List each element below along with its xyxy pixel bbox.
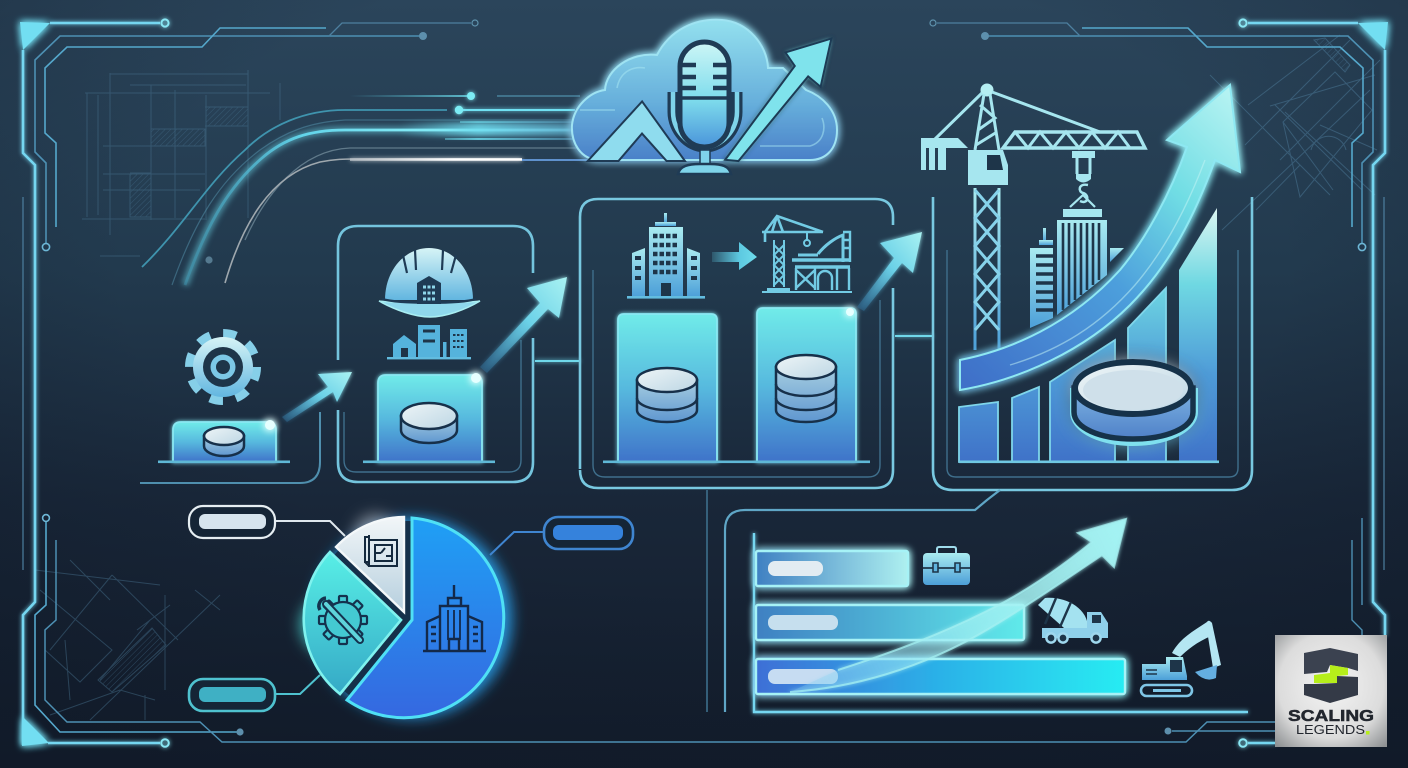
circuit frame: top left corner [20,19,478,745]
baseline [363,460,495,463]
baseline [603,460,870,463]
blueprint sketch: top right [1210,35,1380,230]
coin stack right [776,355,836,422]
bar right [757,308,856,462]
microphone [673,42,737,174]
label: bottom left pill [189,675,320,711]
icon: hard hat [379,248,480,317]
arrow [282,372,352,422]
cloud highlights [580,68,824,146]
logo subtitle: LEGENDS . [1296,723,1369,737]
bar label pill: short [768,561,823,576]
cloud [572,20,837,160]
axes [754,533,1248,712]
icon: concrete mixer truck [1038,598,1108,643]
blueprint sketch: bottom left [35,560,220,720]
bar chart [959,208,1219,463]
large growth arrow [960,85,1240,390]
large coin [1070,362,1198,446]
inner frame [344,340,521,472]
circuit frame: bottom left corner [22,515,1276,747]
icon: office building [627,213,705,299]
pie base [311,521,505,715]
label: right pill [490,517,633,555]
panel: stage 3 two bars [580,199,933,712]
frame [338,226,533,482]
arrow [480,277,567,373]
glow spot [471,373,481,383]
blueprint sketch: top left [82,70,280,256]
arrow highlight [1010,160,1205,365]
bar: short [756,551,908,586]
arrow [857,232,922,311]
icon: tower crane [921,84,1145,350]
panel: horizontal bar chart [725,490,1248,712]
coin [401,403,457,443]
bar [173,422,276,462]
slice: teal services share [304,552,401,694]
bar left [618,314,717,462]
logo: Scaling Legends [1275,635,1387,747]
label: top left pill [189,506,345,538]
glow spot [846,308,854,316]
bar label pill: long [768,669,838,684]
coin stack left [637,368,697,422]
pie chart [189,506,633,718]
icon: excavator [1141,621,1221,696]
pie glow [300,513,512,718]
bar: long [756,659,1125,694]
logo accent dot [1366,731,1370,734]
frame [933,197,1252,490]
panel: stage 2 hard hat and coin [338,226,580,482]
arrow [712,242,757,270]
frame line to next stage [140,412,320,483]
icon: toolbox [923,547,970,585]
bar label pill: medium [768,615,838,630]
inner frame [947,250,1238,477]
growth arrow [727,40,830,160]
coin [204,427,244,456]
zigzag line [590,103,683,160]
connector [535,360,580,362]
connector [895,335,933,337]
icon: crane and bridge [762,216,852,292]
panel: stage 1 small coin [140,334,352,483]
icon: city skyline [387,325,471,359]
icon: city buildings behind the arrow [1030,220,1124,328]
icon: office tower [423,585,486,651]
inner frame [593,270,880,477]
panel: stage 4 crane and large growth [921,84,1252,490]
logo wordmark: SCALING [1288,708,1374,725]
slice: white planning share [336,517,404,612]
flowing data streams into the cloud [142,92,596,285]
logo mark [1304,648,1358,703]
bar [378,375,482,462]
frame [580,199,893,488]
icon: blueprint [365,535,397,566]
icon: cloud with microphone and growth arrow [572,20,837,174]
glow spot [265,420,275,430]
circuit frame: top right corner [930,19,1388,636]
icon: gear [190,334,256,400]
panel outline [725,490,1000,712]
slice: blue construction share [347,518,504,718]
connector to left [706,490,708,712]
arrow [790,519,1126,692]
baseline [158,460,290,463]
bar: medium [756,605,1024,640]
icon: gear and wrench [319,596,367,644]
